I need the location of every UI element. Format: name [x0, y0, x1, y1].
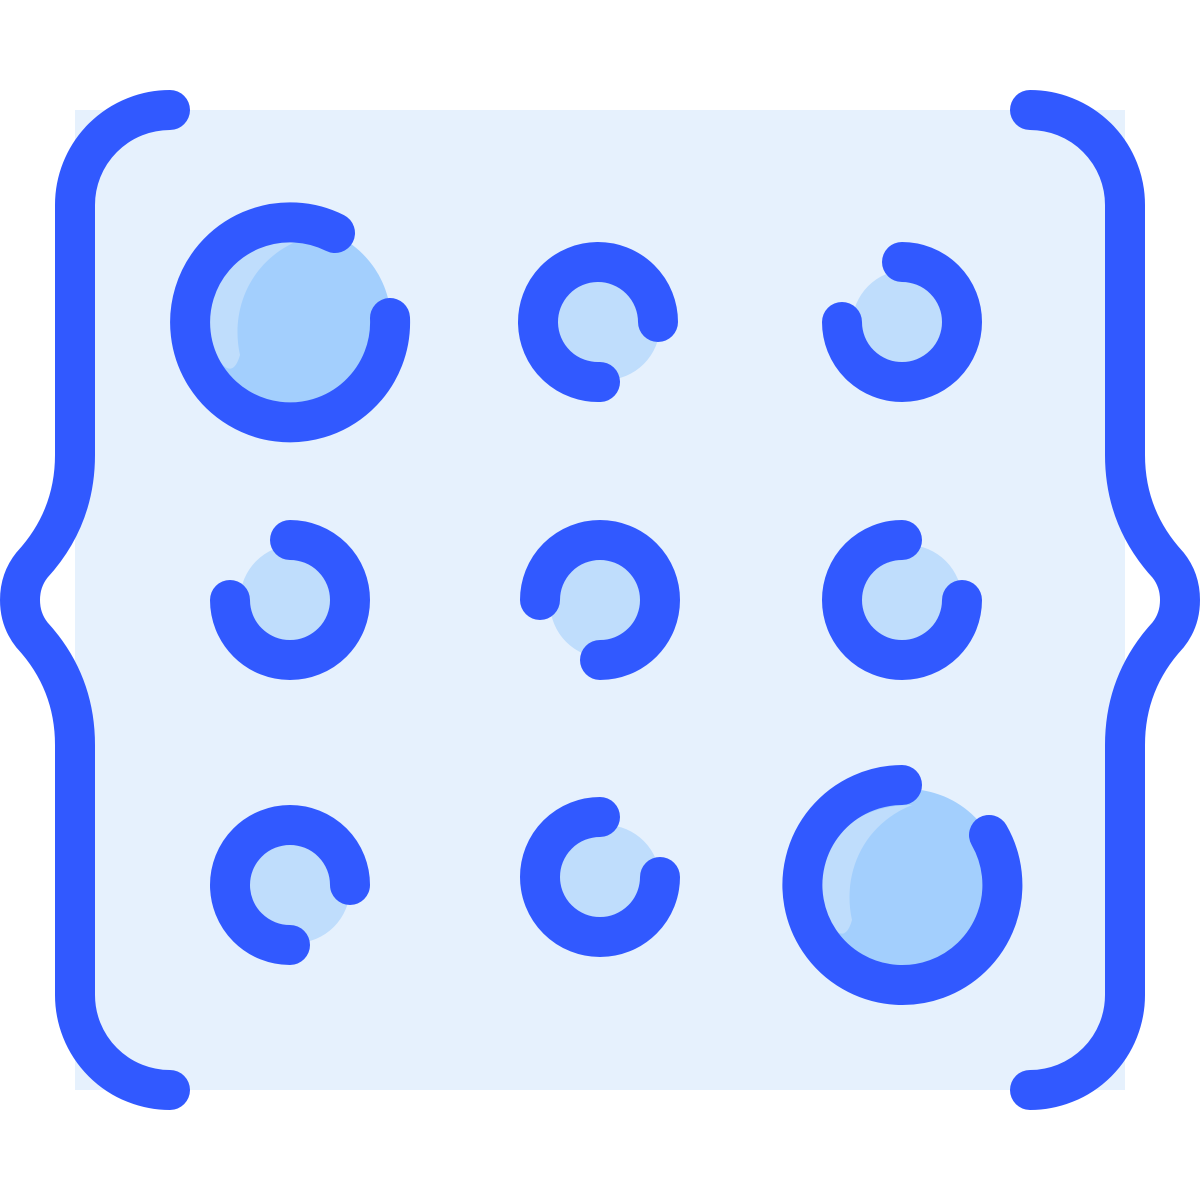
background panel	[75, 110, 1125, 1090]
braces	[20, 110, 1180, 1090]
circle fills	[199, 226, 1003, 981]
circle outlines	[190, 222, 1002, 985]
